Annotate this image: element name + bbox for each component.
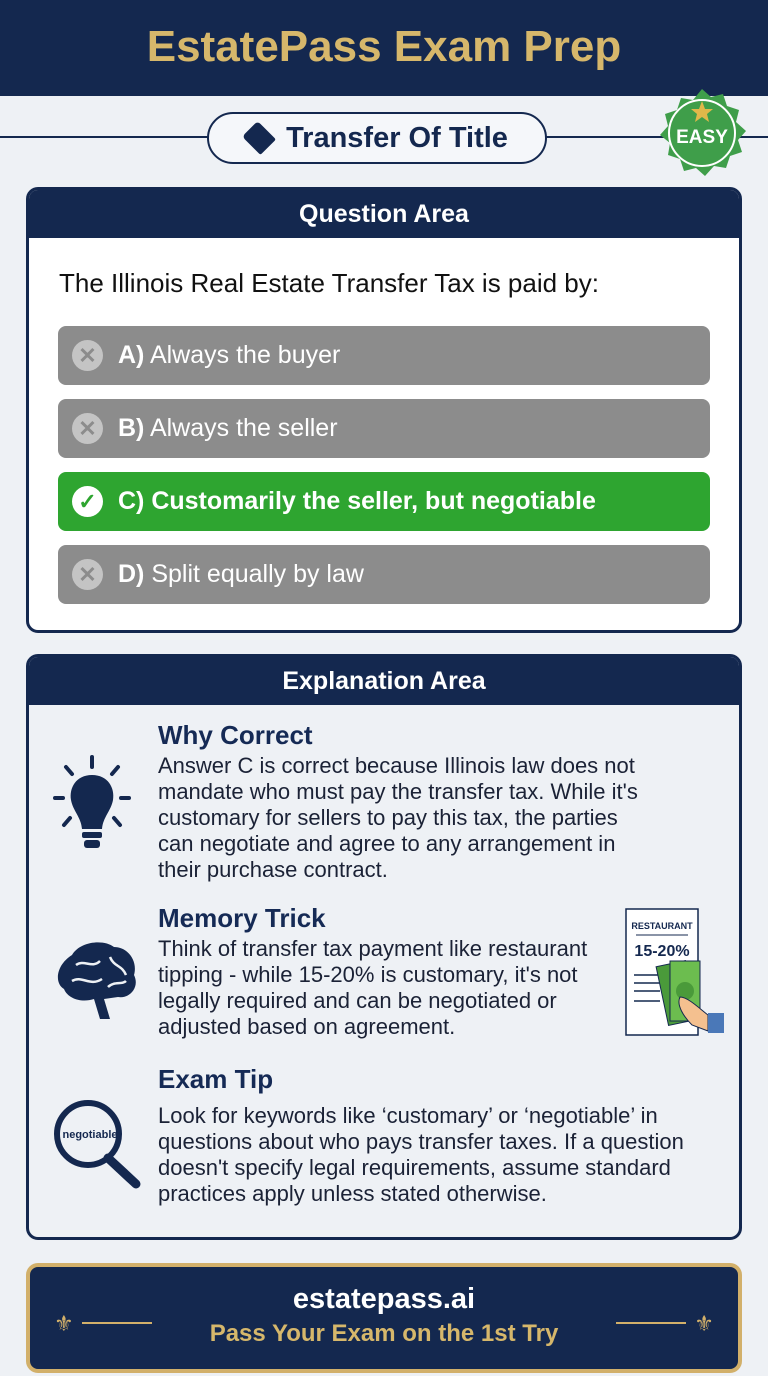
- option A: [58, 326, 710, 385]
- badge: easy: EASY: [676, 127, 728, 148]
- title: EstatePass Exam Prep: [147, 22, 621, 71]
- footer banner: [26, 1263, 742, 1373]
- panel: explanation: [26, 654, 742, 1240]
- option A: A) Always the buyer: [118, 341, 340, 369]
- option C correct: ✓: [78, 489, 97, 514]
- topic pill: Transfer Of Title: [286, 122, 508, 154]
- option D: ✕: [78, 562, 97, 587]
- option C correct: C) Customarily the seller, but negotiable: [118, 487, 596, 515]
- option C correct: [58, 472, 710, 531]
- explanation header: [29, 657, 739, 705]
- explanation header: Explanation Area: [282, 667, 486, 695]
- question text: The Illinois Real Estate Transfer Tax is paid by:: [59, 268, 599, 298]
- icon: magnifier negotiable: negotiable: [62, 1129, 118, 1141]
- header bar: [0, 0, 768, 96]
- icon: lightbulb: [53, 755, 131, 848]
- icon: receipt with cash: 15-20%: [634, 943, 690, 960]
- footer site: estatepass.ai: [293, 1283, 475, 1315]
- option D: D) Split equally by law: [118, 560, 364, 588]
- panel: question: [26, 187, 742, 633]
- icon: brain: [58, 942, 136, 1019]
- footer tagline: Pass Your Exam on the 1st Try: [210, 1320, 558, 1347]
- question header: [29, 190, 739, 238]
- topic pill: [207, 112, 547, 164]
- badge: easy: [660, 89, 746, 176]
- memory trick: Memory Trick: [158, 903, 326, 933]
- question header: Question Area: [299, 200, 469, 228]
- exam tip: Look for keywords like ‘customary’ or ‘negotiable’ in questions about who pays transfer taxes. If a question doesn't specify legal requirements, assume standard practices apply unless stated otherwise.: [158, 1103, 684, 1206]
- option A: ✕: [78, 343, 97, 368]
- memory trick: Think of transfer tax payment like restaurant tipping - while 15-20% is customary, it's not legally required and can be negotiated or adjusted based on agreement.: [158, 936, 587, 1039]
- why correct: Answer C is correct because Illinois law does not mandate who must pay the transfer tax. While it's customary for sellers to pay this tax, the parties can negotiate and agree to any arrangement in their purchase contract.: [158, 753, 638, 882]
- icon: receipt with cash: RESTAURANT: [631, 921, 693, 931]
- option D: [58, 545, 710, 604]
- footer banner: ⚜: [694, 1311, 714, 1336]
- icon: magnifier negotiable: [54, 1100, 140, 1188]
- icon: receipt with cash: [625, 908, 724, 1036]
- option B: ✕: [78, 416, 97, 441]
- why correct: Why Correct: [158, 720, 313, 750]
- exam tip: Exam Tip: [158, 1064, 273, 1094]
- footer banner: ⚜: [54, 1311, 74, 1336]
- option B: B) Always the seller: [118, 414, 338, 442]
- option B: [58, 399, 710, 458]
